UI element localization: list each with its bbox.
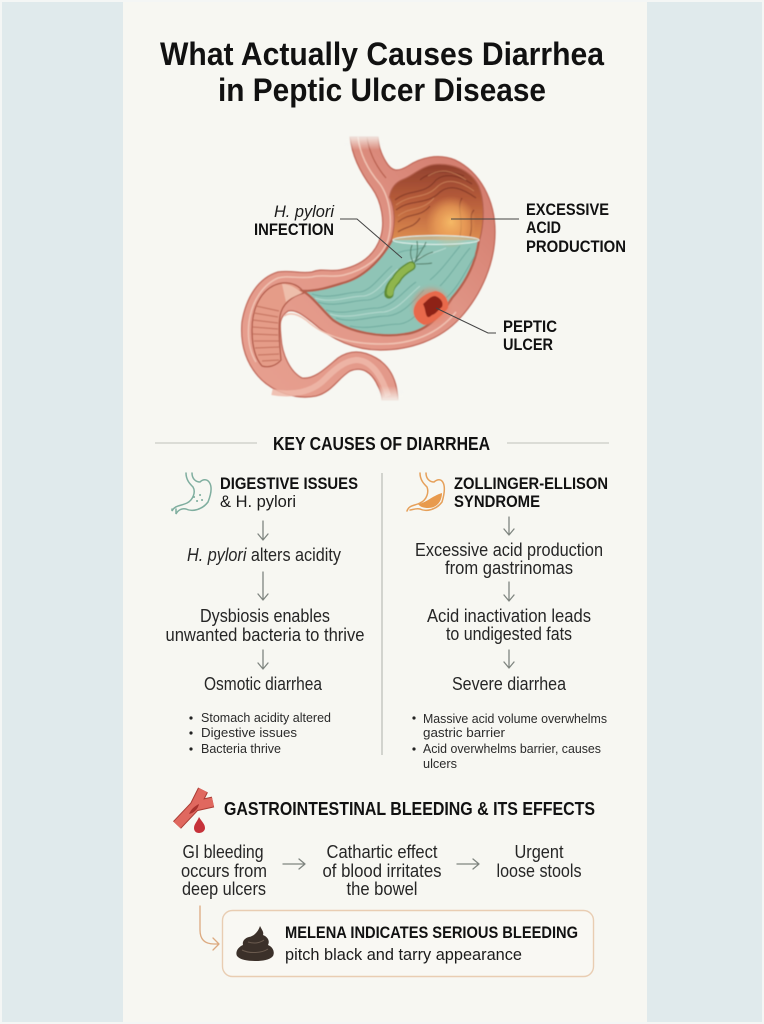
step [166,605,364,645]
arrow [504,582,514,601]
heading: DIGESTIVE ISSUES [220,474,358,493]
arrow [258,572,268,600]
step [415,539,603,578]
bullet list: Acid overwhelms barrier, causes [423,741,601,756]
heading: & H. pylori [220,492,296,511]
step: urgent loose stools [496,841,582,881]
bullet list: Bacteria thrive [201,741,281,756]
callout text [285,923,578,964]
label: excessive acid production: PRODUCTION [526,237,626,256]
column divider [381,473,383,755]
fluid surface [393,236,479,244]
step: urgent loose stools: loose stools [496,860,582,881]
step: H. pylori alters acidity [187,544,342,565]
step: cathartic effect: of blood irritates [322,860,442,881]
stomach illustration [242,134,495,402]
panel: Zollinger-Ellison syndrome [407,473,608,771]
callout text: pitch black and tarry appearance [285,945,522,964]
icon: stomach outline teal [172,473,211,514]
title: What Actually Causes Diarrhea [160,36,604,72]
heading: ZOLLINGER-ELLISON [454,474,608,493]
step: GI bleeding: GI bleeding [182,841,264,862]
panel: digestive issues and H. pylori [166,473,364,756]
step: cathartic effect: Cathartic effect [326,841,438,862]
fluid fold lines [312,246,476,327]
title: in Peptic Ulcer Disease [218,72,546,108]
arrow: connector to melena [200,906,219,950]
acid glow [428,198,474,246]
label: peptic ulcer: ULCER [503,335,553,354]
step: Acid inactivation leads [427,605,591,626]
arrow [283,859,305,869]
bullet list [189,710,331,756]
heading: GASTROINTESTINAL BLEEDING & ITS EFFECTS [224,799,595,819]
callout: melena [222,910,594,976]
step: cathartic effect [322,841,442,899]
step: from gastrinomas [445,557,573,578]
step [427,605,591,644]
stomach outer wall [242,137,495,400]
esophagus fade [344,134,384,150]
arrow [504,650,514,668]
lumen contents [312,160,490,327]
bullet list: Digestive issues [201,725,297,740]
H. pylori bacterium [389,241,433,294]
label: peptic ulcer [436,308,557,354]
label: peptic ulcer: PEPTIC [503,317,557,336]
heading [220,474,358,511]
callout text: MELENA INDICATES SERIOUS BLEEDING [285,923,578,942]
arrow [258,521,268,540]
arrow [457,859,479,869]
bullet list: Stomach acidity altered [201,710,331,725]
label: H. pylori infection [254,202,402,258]
step: Excessive acid production [415,539,603,560]
wall lining strokes [248,137,390,362]
pyloric canal with folds [252,283,304,367]
section heading: key causes: KEY CAUSES OF DIARRHEA [273,434,490,454]
heading [454,474,608,511]
step: Dysbiosis enables [200,605,330,626]
icon: stomach orange [407,473,444,511]
panel: gastrointestinal bleeding [177,790,595,976]
icon: melena stool [236,926,274,961]
step: GI bleeding: deep ulcers [182,878,266,899]
peptic ulcer [413,288,449,325]
step: Osmotic diarrhea [204,673,323,694]
step: to undigested fats [446,623,572,644]
bullet list [412,711,607,771]
upper acid zone [390,164,482,240]
title [160,36,604,108]
label: excessive acid production [451,200,626,256]
step: urgent loose stools: Urgent [514,841,564,862]
label: excessive acid production: ACID [526,218,561,237]
step: Severe diarrhea [452,673,567,694]
step: GI bleeding: occurs from [181,860,267,881]
bullet list: gastric barrier [423,725,506,740]
arrow [258,650,268,669]
step: cathartic effect: the bowel [346,878,418,899]
step: unwanted bacteria to thrive [166,624,364,645]
duodenum fade [376,386,404,402]
heading: SYNDROME [454,492,540,511]
label: H. pylori infection: H. pylori [274,202,335,221]
arrow [504,517,514,535]
label: excessive acid production: EXCESSIVE [526,200,609,219]
lumen border [303,165,483,335]
icon: bleeding blood vessel [177,790,213,833]
bullet list: Massive acid volume overwhelms [423,711,607,726]
bullet list: ulcers [423,756,457,771]
label: H. pylori infection: INFECTION [254,220,334,239]
step: GI bleeding [181,841,267,899]
